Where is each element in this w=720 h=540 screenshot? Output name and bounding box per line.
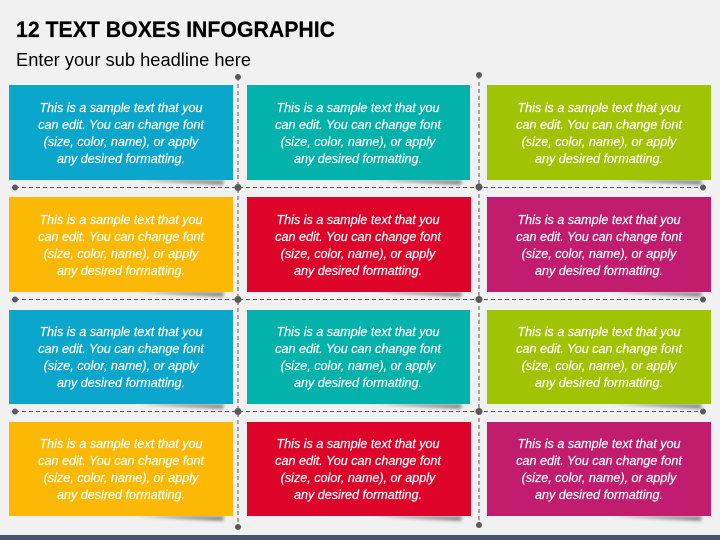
- panel: row 2 magenta box: This is a sample text that you: [517, 213, 681, 227]
- panel: row 1 teal box: [247, 85, 470, 185]
- panel: row 3 green box: This is a sample text that you: [517, 325, 681, 339]
- panel: row 3 blue box: (size, color, name), or apply: [44, 359, 199, 373]
- panel: row 3 green box: can edit. You can change font: [516, 342, 682, 356]
- panel: row 4 magenta box: any desired formatting.: [535, 488, 663, 502]
- panel: row 2 yellow box: can edit. You can change font: [38, 230, 204, 244]
- panel: row 3 teal box: This is a sample text that you: [276, 325, 440, 339]
- panel: row 2 yellow box: (size, color, name), or apply: [44, 247, 199, 261]
- panel: row 1 teal box: (size, color, name), or apply: [281, 135, 436, 149]
- panel: row 2 red box: (size, color, name), or apply: [281, 247, 436, 261]
- panel: row 3 blue box: This is a sample text that you: [39, 325, 203, 339]
- panel: row 4 red box: any desired formatting.: [294, 488, 422, 502]
- panel: row 4 magenta box: [487, 422, 711, 521]
- panel: row 4 yellow box: [9, 422, 233, 521]
- subtitle: Enter your sub headline here: [16, 50, 251, 70]
- panel: row 4 yellow box: can edit. You can change font: [38, 454, 204, 468]
- panel: row 3 green box: (size, color, name), or apply: [522, 359, 677, 373]
- panel: row 3 teal box: [247, 310, 470, 409]
- panel: row 1 green box: (size, color, name), or apply: [522, 135, 677, 149]
- panel: row 1 blue box: any desired formatting.: [57, 152, 185, 166]
- panel: row 2 yellow box: This is a sample text that you: [39, 213, 203, 227]
- panel: row 1 blue box: This is a sample text that you: [39, 101, 203, 115]
- title: 12 TEXT BOXES INFOGRAPHIC: [16, 17, 335, 42]
- panel: row 4 red box: (size, color, name), or apply: [281, 471, 436, 485]
- panel: row 1 teal box: can edit. You can change font: [275, 118, 441, 132]
- panel: row 3 green box: any desired formatting.: [535, 376, 663, 390]
- panel: row 2 magenta box: [487, 197, 711, 297]
- panel: row 1 teal box: any desired formatting.: [294, 152, 422, 166]
- panel: row 4 red box: can edit. You can change font: [275, 454, 441, 468]
- panel: row 3 green box: [487, 310, 711, 409]
- panel: row 4 magenta box: (size, color, name), or apply: [522, 471, 677, 485]
- panel: row 2 yellow box: [9, 197, 233, 297]
- panel: row 3 blue box: can edit. You can change font: [38, 342, 204, 356]
- panel: row 4 magenta box: can edit. You can change font: [516, 454, 682, 468]
- panel: row 3 teal box: can edit. You can change font: [275, 342, 441, 356]
- panel: row 4 magenta box: This is a sample text that you: [517, 437, 681, 451]
- panel: row 3 blue box: [9, 310, 233, 409]
- panel: row 2 magenta box: any desired formatting.: [535, 264, 663, 278]
- panel: row 2 yellow box: any desired formatting.: [57, 264, 185, 278]
- panel: row 3 teal box: (size, color, name), or apply: [281, 359, 436, 373]
- panel: row 4 yellow box: This is a sample text that you: [39, 437, 203, 451]
- panel: row 4 red box: [247, 422, 471, 521]
- panel: row 1 blue box: can edit. You can change font: [38, 118, 204, 132]
- panel: row 1 green box: This is a sample text that you: [517, 101, 681, 115]
- panel: row 3 teal box: any desired formatting.: [294, 376, 422, 390]
- panel: row 1 blue box: [9, 85, 233, 185]
- panel: row 4 red box: This is a sample text that you: [276, 437, 440, 451]
- panel: row 4 yellow box: any desired formatting.: [57, 488, 185, 502]
- panel: row 2 red box: can edit. You can change font: [275, 230, 441, 244]
- panel: row 1 green box: any desired formatting.: [535, 152, 663, 166]
- panel: row 1 green box: [487, 85, 711, 185]
- panel: row 2 red box: This is a sample text that you: [276, 213, 440, 227]
- panel: row 2 red box: [247, 197, 471, 297]
- panel: row 1 teal box: This is a sample text that you: [276, 101, 440, 115]
- panel: row 3 blue box: any desired formatting.: [57, 376, 185, 390]
- panel: row 2 red box: any desired formatting.: [294, 264, 422, 278]
- panel: row 1 green box: can edit. You can change font: [516, 118, 682, 132]
- panel: row 2 magenta box: can edit. You can change font: [516, 230, 682, 244]
- footer bar: [0, 535, 720, 540]
- panel: row 2 magenta box: (size, color, name), or apply: [522, 247, 677, 261]
- panel: row 4 yellow box: (size, color, name), or apply: [44, 471, 199, 485]
- panel: row 1 blue box: (size, color, name), or apply: [44, 135, 199, 149]
